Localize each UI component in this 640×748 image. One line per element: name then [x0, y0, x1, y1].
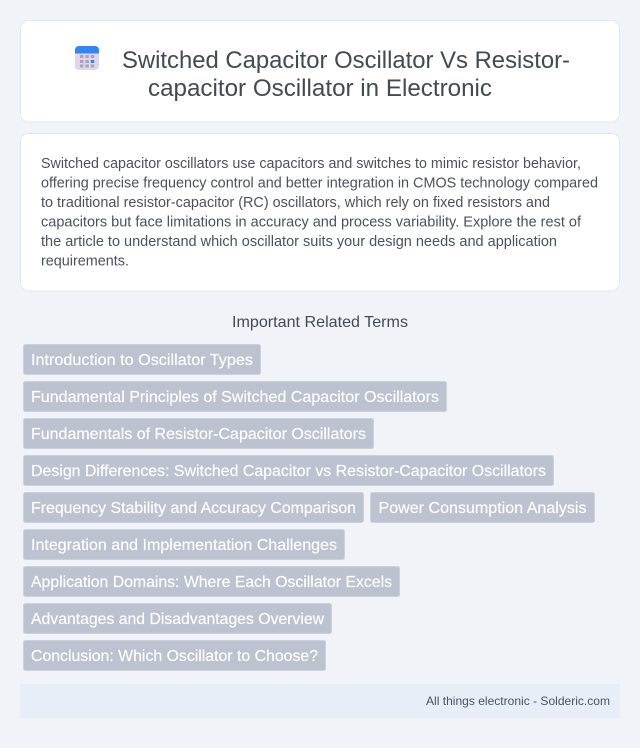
text block: summary	[41, 156, 598, 270]
tag: conclusion: Conclusion: Which Oscillator to Choose?	[31, 648, 318, 665]
tag: integration: Integration and Implementation Challenges	[31, 537, 337, 554]
tag: application domains	[24, 566, 400, 596]
tag: fundamental principles	[24, 382, 446, 412]
tag: advantages: Advantages and Disadvantages Overview	[31, 611, 324, 628]
tag: integration	[24, 530, 344, 560]
tag: fundamentals RC: Fundamentals of Resistor-Capacitor Oscillators	[31, 426, 366, 443]
tag: design differences: Design Differences: Switched Capacitor vs Resistor-Capacitor Oscillators	[31, 463, 546, 480]
tag: fundamental principles: Fundamental Principles of Switched Capacitor Oscillators	[31, 389, 439, 406]
tag: introduction	[24, 344, 260, 374]
text block: summary: capacitors but face limitations in accuracy and process variability. Explore the rest of	[41, 214, 582, 230]
text block: summary: Switched capacitor oscillators use capacitors and switches to mimic resistor behavior,	[41, 156, 581, 172]
tag: frequency stability	[24, 492, 364, 522]
tag: fundamentals RC	[24, 418, 374, 448]
title: Switched Capacitor Oscillator Vs Resistor-	[122, 47, 570, 74]
tag: design differences	[24, 456, 554, 486]
icon: calendar	[75, 46, 99, 70]
text block: summary: requirements.	[41, 254, 129, 270]
tag: advantages	[24, 604, 332, 634]
tag: frequency stability: Frequency Stability and Accuracy Comparison	[31, 500, 356, 517]
tag: conclusion	[24, 640, 326, 670]
tag: power consumption	[370, 492, 594, 522]
tag: application domains: Application Domains: Where Each Oscillator Excels	[31, 574, 392, 591]
title	[122, 47, 570, 102]
tag: power consumption: Power Consumption Analysis	[378, 500, 586, 517]
footer	[20, 684, 620, 718]
text block: summary: the article to understand which oscillator suits your design needs and application	[41, 234, 557, 250]
panel: summary	[20, 134, 620, 291]
text block: summary: to traditional resistor-capacitor (RC) oscillators, which rely on fixed resistors and	[41, 195, 550, 211]
text block: summary: offering precise frequency control and better integration in CMOS technology compared	[41, 176, 598, 192]
panel: header	[20, 20, 620, 122]
footer: All things electronic - Solderic.com	[426, 694, 610, 708]
tag: introduction: Introduction to Oscillator Types	[31, 352, 253, 369]
heading: related terms: Important Related Terms	[232, 314, 408, 331]
title: capacitor Oscillator in Electronic	[148, 75, 492, 102]
